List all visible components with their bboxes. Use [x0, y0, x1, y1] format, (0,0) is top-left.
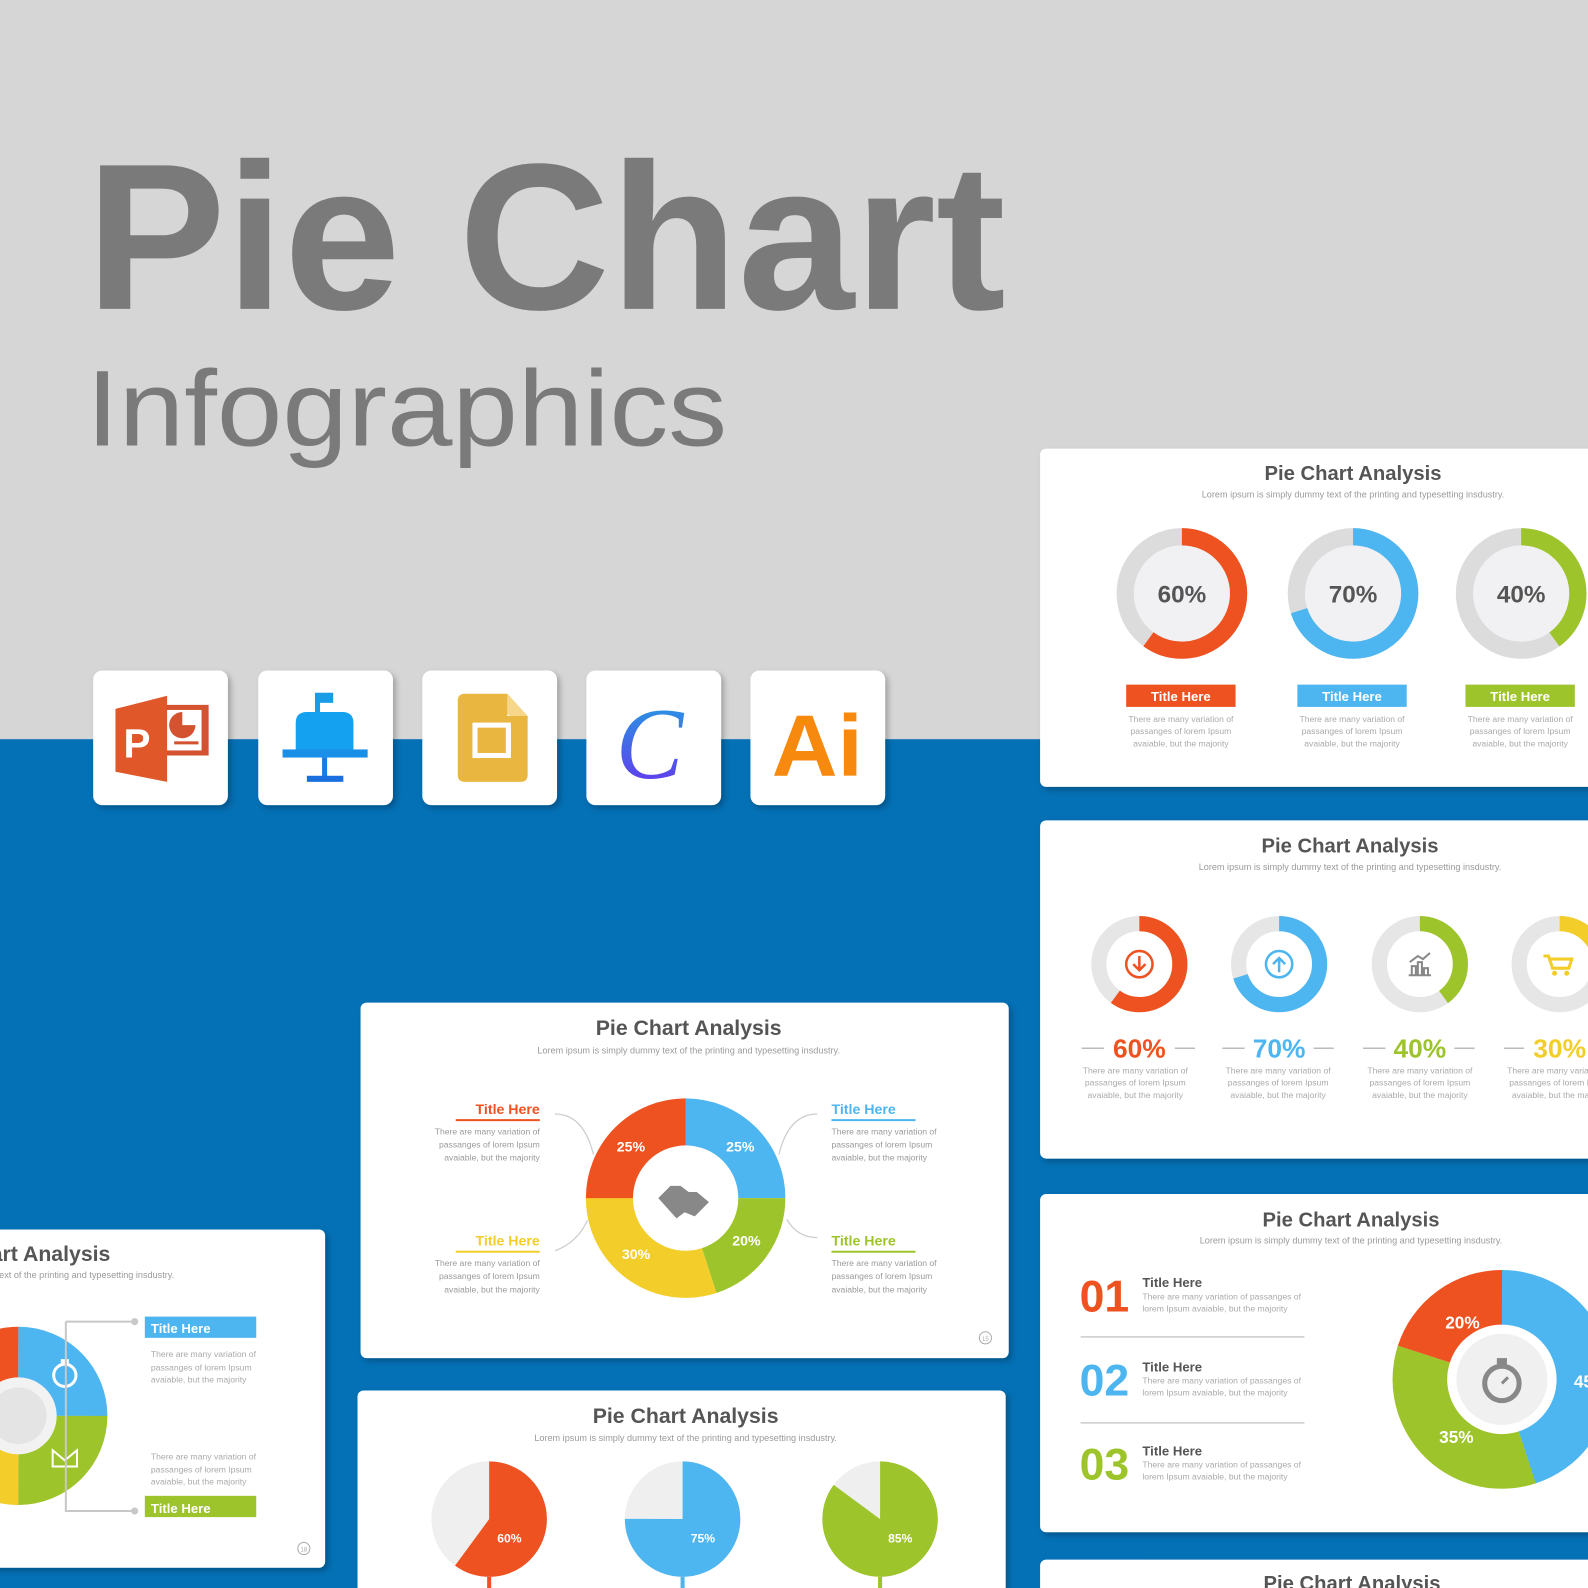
panel: center donut card: Lorem ipsum is simply dummy text of the printing and typesetting insdustry. [537, 1045, 840, 1055]
panel: card A circles: Lorem ipsum is simply dummy text of the printing and typesetting insdustry. [1202, 489, 1504, 499]
panel: center donut card: 15 [982, 1337, 989, 1343]
panel: card C list + pie: Title Here [1142, 1275, 1202, 1290]
panel: card C list + pie: There are many variation of passanges of [1142, 1459, 1302, 1469]
panel: card A circles: passanges of lorem Ipsum [1302, 726, 1402, 736]
icon row [93, 670, 885, 805]
panel: center donut card: Title Here [476, 1234, 540, 1250]
icon: illustrator: Ai [772, 698, 863, 795]
panel: card A circles: There are many variation of [1128, 714, 1234, 724]
panel: card C list + pie: lorem Ipsum avaiable, but the majority [1142, 1304, 1288, 1314]
panel: left card: passanges of lorem Ipsum [151, 1465, 252, 1475]
panel: center donut card: Title Here [476, 1102, 540, 1118]
panel: bottom pies card: 60% [497, 1531, 522, 1545]
panel: card C list + pie: Pie Chart Analysis [1262, 1209, 1440, 1231]
panel: center donut card: 30% [622, 1247, 651, 1263]
panel: card B icon donuts: Lorem ipsum is simply dummy text of the printing and typesetting insdustry. [1199, 862, 1501, 872]
panel: card B icon donuts: 30% [1533, 1033, 1586, 1063]
panel: center donut card: 20% [732, 1234, 761, 1250]
panel: bottom pies card: Lorem ipsum is simply dummy text of the printing and typesetting insdustry. [534, 1433, 837, 1443]
panel: center donut card: passanges of lorem Ipsum [831, 1271, 932, 1281]
panel: bottom pies card [358, 1391, 1006, 1588]
panel: card A circles: There are many variation of [1468, 714, 1573, 724]
panel: card C list + pie: There are many variation of passanges of [1142, 1291, 1302, 1301]
panel: center donut card [361, 1003, 1009, 1358]
panel: card B icon donuts: passanges of lorem Ipsum [1228, 1078, 1328, 1088]
panel: left card: Title Here [151, 1501, 211, 1516]
pie chart C: 35% [1439, 1427, 1474, 1447]
panel: left card: There are many variation of [151, 1349, 257, 1359]
donut 70%: 70% [1329, 582, 1377, 609]
panel: left card [0, 1229, 325, 1568]
donut 40% [1464, 537, 1578, 650]
panel: card B icon donuts: avaiable, but the majority [1088, 1090, 1184, 1100]
panel: center donut card: avaiable, but the majority [444, 1153, 540, 1163]
panel: center donut card: Title Here [831, 1234, 896, 1250]
panel: card C list + pie: Title Here [1142, 1359, 1202, 1374]
panel: left card: passanges of lorem Ipsum [151, 1362, 252, 1372]
icon: powerpoint: P [124, 721, 151, 767]
panel: card C list + pie: Title Here [1142, 1443, 1202, 1458]
panel: card D (cut) [1040, 1560, 1588, 1588]
icon: illustrator [750, 670, 885, 805]
panel: center donut card: passanges of lorem Ipsum [439, 1271, 540, 1281]
panel: bottom pies card: Pie Chart Analysis [593, 1404, 779, 1428]
panel: card C list + pie: Lorem ipsum is simply dummy text of the printing and typesetting insdustry. [1200, 1236, 1502, 1246]
panel: card B icon donuts: avaiable, but the majority [1230, 1090, 1327, 1100]
panel: card C list + pie: 02 [1080, 1357, 1129, 1406]
panel: bottom pies card: 85% [888, 1531, 913, 1545]
icon: canva: C [616, 688, 685, 800]
icon: canva [586, 670, 721, 805]
panel: card B icon donuts: Pie Chart Analysis [1261, 836, 1439, 858]
panel: center donut card: Pie Chart Analysis [596, 1016, 782, 1040]
panel: card B icon donuts [1040, 820, 1588, 1159]
icon: powerpoint [93, 670, 228, 805]
panel: card C list + pie: There are many variation of passanges of [1142, 1375, 1302, 1385]
panel: card A circles: Pie Chart Analysis [1265, 463, 1442, 485]
panel: card B icon donuts: 70% [1253, 1033, 1305, 1063]
pie chart C: 20% [1445, 1313, 1480, 1333]
donut 60%: 60% [1158, 582, 1206, 609]
panel: left card: 18 [300, 1548, 308, 1554]
panel: card C list + pie: 01 [1080, 1273, 1129, 1322]
panel: card A circles: Title Here [1490, 689, 1550, 704]
panel: center donut card: passanges of lorem Ipsum [439, 1139, 540, 1149]
panel: card A circles: Title Here [1151, 689, 1211, 704]
panel: bottom pies card: 75% [691, 1531, 715, 1545]
subtitle: Infographics [86, 349, 727, 469]
title: Pie Chart [86, 121, 1006, 354]
panel: left card: There are many variation of [151, 1451, 257, 1461]
donut 70% [1296, 537, 1410, 650]
panel: card C list + pie: lorem Ipsum avaiable, but the majority [1142, 1388, 1288, 1398]
panel: card A circles: passanges of lorem Ipsum [1470, 726, 1571, 736]
panel: card C list + pie: lorem Ipsum avaiable, but the majority [1142, 1472, 1288, 1482]
panel: center donut card: passanges of lorem Ipsum [831, 1139, 932, 1149]
panel: card A circles: passanges of lorem Ipsum [1130, 726, 1231, 736]
panel: card B icon donuts: passanges of lorem Ipsum [1369, 1078, 1470, 1088]
panel: center donut card: There are many variation of [831, 1126, 937, 1136]
icon: google slides [422, 670, 557, 805]
panel: left card: avaiable, but the majority [151, 1477, 247, 1487]
panel: center donut card: 25% [617, 1140, 646, 1156]
panel: card C list + pie: 03 [1080, 1441, 1129, 1490]
donut 60% [1125, 537, 1239, 650]
panel: left card: avaiable, but the majority [151, 1374, 247, 1384]
panel: card C list + pie [1040, 1194, 1588, 1532]
panel: card B icon donuts: 40% [1394, 1033, 1446, 1063]
pie chart C [1399, 1276, 1588, 1483]
panel: card B icon donuts: 60% [1113, 1033, 1166, 1063]
panel: center donut card: Title Here [831, 1102, 896, 1118]
panel: center donut card: 25% [726, 1140, 755, 1156]
panel: left card: Title Here [151, 1321, 211, 1336]
panel: card A circles: There are many variation of [1299, 714, 1405, 724]
panel: card A circles: avaiable, but the majority [1133, 738, 1229, 748]
donut 40%: 40% [1497, 582, 1545, 609]
panel: card B icon donuts: There are many variation of [1226, 1066, 1331, 1076]
icon: keynote [258, 670, 393, 805]
panel: card B icon donuts: passanges of lorem Ipsum [1085, 1078, 1186, 1088]
panel: card A circles: avaiable, but the majority [1472, 738, 1569, 748]
panel: center donut card: avaiable, but the majority [444, 1284, 540, 1294]
panel: card B icon donuts: There are many variation of [1367, 1066, 1473, 1076]
panel: center donut card: avaiable, but the majority [831, 1153, 928, 1163]
panel: card A circles: Title Here [1322, 689, 1382, 704]
panel: center donut card: There are many variation of [435, 1126, 540, 1136]
panel: center donut card: There are many variation of [831, 1258, 937, 1268]
panel: card B icon donuts: There are many variation of [1083, 1066, 1188, 1076]
panel: card A circles [1040, 449, 1588, 787]
panel: center donut card: There are many variation of [435, 1258, 540, 1268]
panel: card A circles: avaiable, but the majority [1304, 738, 1400, 748]
panel: card B icon donuts: avaiable, but the majority [1372, 1090, 1468, 1100]
panel: center donut card: avaiable, but the majority [831, 1284, 928, 1294]
